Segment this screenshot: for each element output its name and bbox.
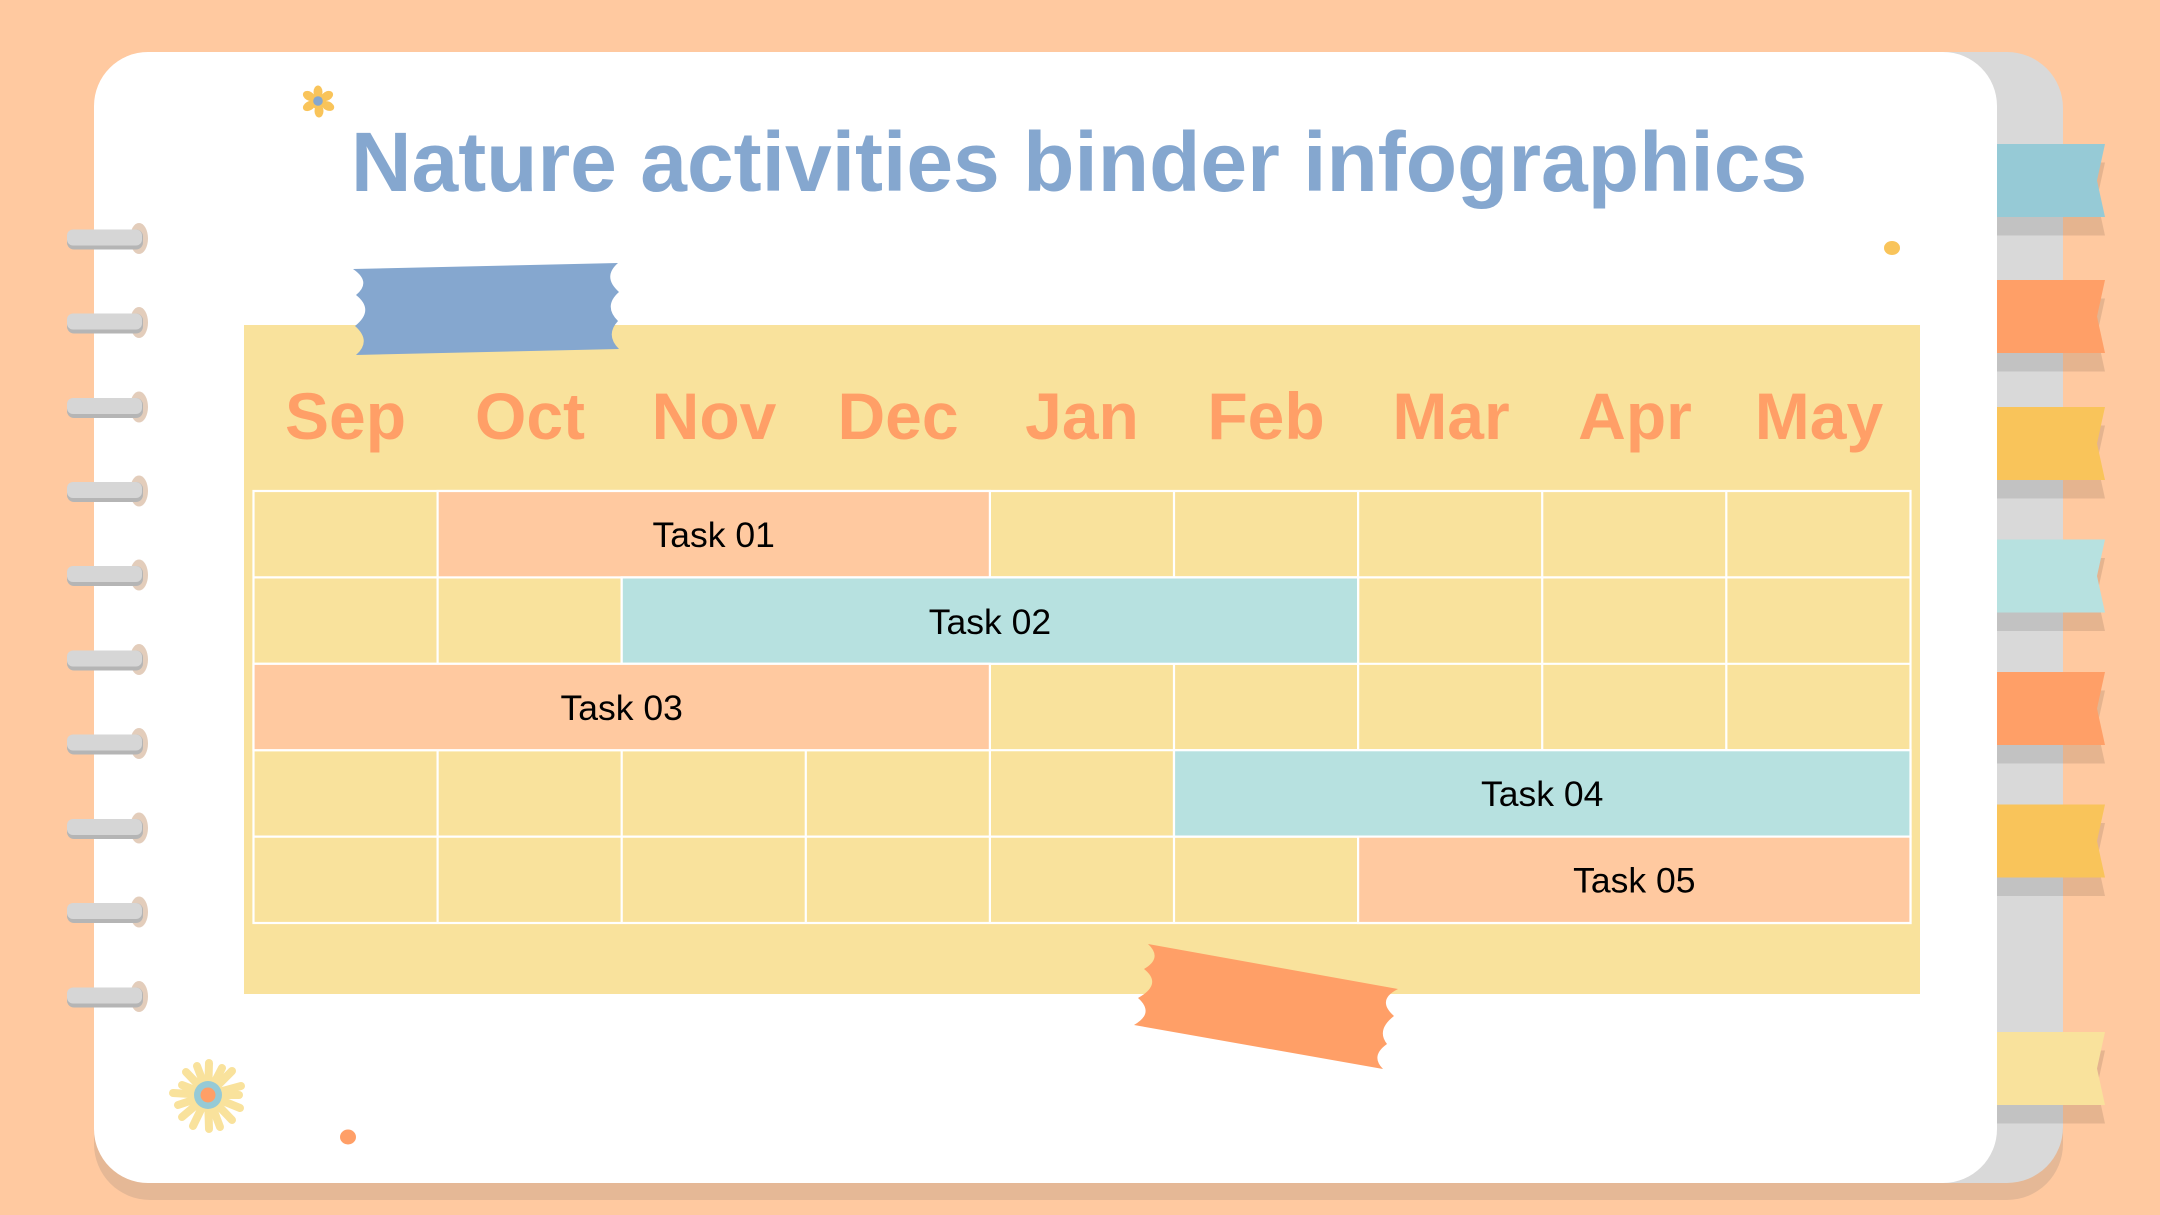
task 02 bar: Task 02: [929, 602, 1051, 642]
decorative dot: bottom left: [340, 1130, 356, 1144]
gantt grid: [254, 491, 1910, 923]
washi tape: orange: [1134, 944, 1398, 1069]
tab: teal: [1997, 144, 2105, 236]
month headers: Dec: [837, 379, 959, 453]
tab: orange 2: [1997, 672, 2105, 764]
month headers: Feb: [1207, 379, 1325, 453]
task 05 bar: Task 05: [1573, 860, 1695, 900]
month headers: Mar: [1392, 379, 1510, 453]
month headers: Jan: [1025, 379, 1139, 453]
binder rings: [67, 223, 148, 1012]
tab: yellow: [1997, 1032, 2105, 1124]
task 03 bar: Task 03: [561, 688, 683, 728]
tab: orange: [1997, 280, 2105, 372]
month headers: Oct: [475, 379, 585, 453]
month headers: [285, 379, 1883, 453]
task 04 bar: Task 04: [1481, 774, 1603, 814]
task 04 bar: [1174, 750, 1910, 837]
task 01 bar: [438, 491, 990, 577]
task 01 bar: Task 01: [653, 515, 775, 555]
task 02 bar: [622, 577, 1358, 664]
month headers: Nov: [652, 379, 777, 453]
washi tape: blue: [353, 263, 619, 355]
tab: gold: [1997, 407, 2105, 498]
decorative dot: top right: [1884, 241, 1900, 255]
month headers: Apr: [1578, 379, 1692, 453]
binder back cover: [1800, 52, 2063, 1183]
task 03 bar: [254, 664, 990, 750]
gantt panel: [244, 325, 1920, 994]
month headers: Sep: [285, 379, 406, 453]
icon: small flower: [301, 86, 336, 118]
month headers: May: [1755, 379, 1883, 453]
icon: sun flower: [173, 1063, 241, 1129]
tab: gold 2: [1997, 804, 2105, 896]
side tabs: [1997, 144, 2105, 1124]
tab: light teal: [1997, 540, 2105, 631]
title: Nature activities binder infographics: [351, 115, 1807, 209]
task 05 bar: [1358, 837, 1910, 923]
